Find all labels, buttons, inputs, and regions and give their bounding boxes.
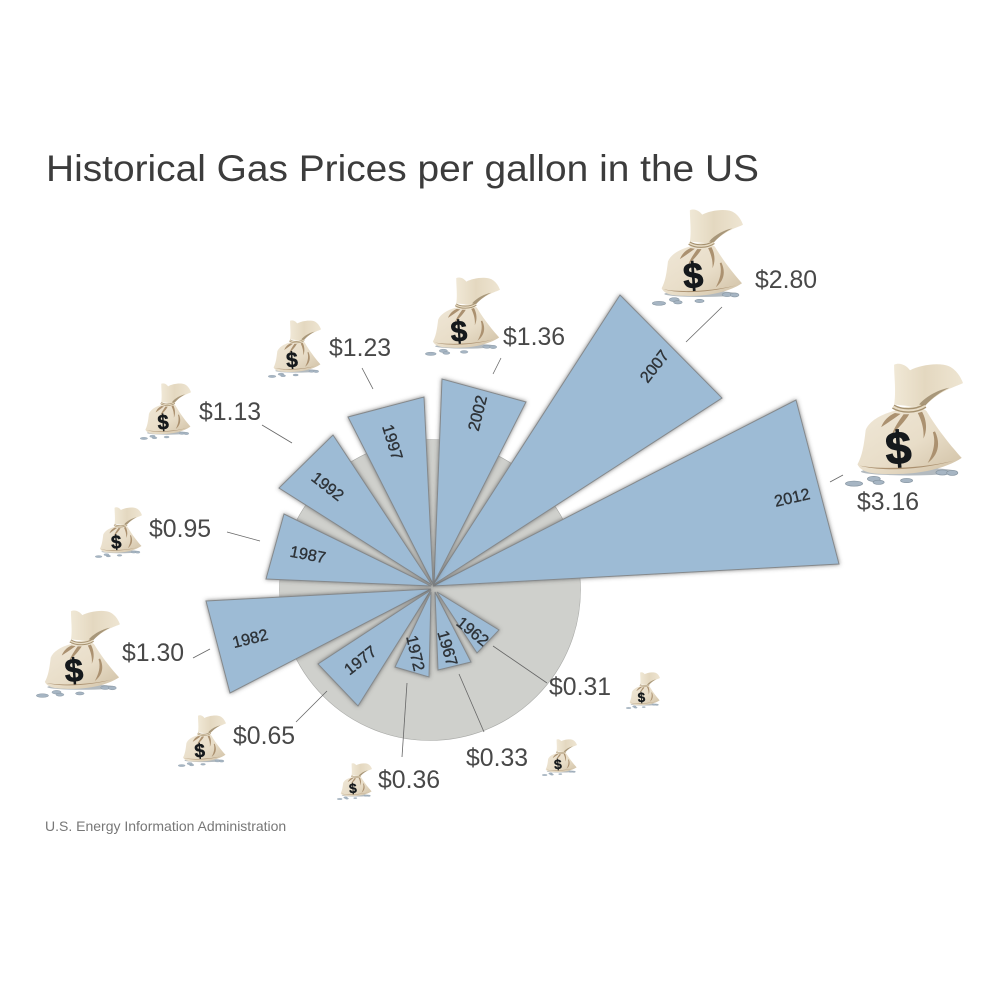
year labels: 1977 (341, 643, 380, 679)
year labels: 1997 (378, 422, 406, 462)
value labels: $3.16 (857, 489, 919, 516)
value labels: $1.23 (329, 335, 391, 362)
wedge: 1987 (266, 514, 431, 586)
value labels: $1.36 (503, 324, 565, 351)
year labels: 1982 (231, 626, 270, 652)
wedge: 1992 (279, 435, 432, 585)
wedge: 1967 (435, 592, 471, 670)
year labels (231, 347, 812, 679)
year labels: 1967 (433, 628, 461, 668)
leader lines (193, 307, 843, 757)
year labels: 2007 (637, 347, 673, 386)
wedge: 2007 (433, 295, 722, 585)
wedge: 1982 (206, 589, 431, 693)
value labels: $1.30 (122, 640, 184, 667)
year labels: 1987 (288, 543, 327, 567)
year labels: 1992 (308, 469, 347, 505)
wedge: 1997 (348, 397, 433, 584)
wedge: 2002 (434, 379, 526, 583)
wedge: 1977 (318, 590, 431, 706)
value labels: $0.31 (549, 674, 611, 701)
value labels (122, 267, 919, 794)
year labels: 2012 (773, 485, 812, 511)
value labels: $0.95 (149, 516, 211, 543)
chart: radial gas price wedges (206, 295, 839, 740)
money bag icons (36, 210, 963, 800)
reference circle (280, 440, 580, 740)
value labels: $0.33 (466, 745, 528, 772)
source note: U.S. Energy Information Administration (45, 818, 286, 834)
year labels: 1972 (402, 634, 428, 673)
value labels: $0.36 (378, 767, 440, 794)
wedge: 2012 (433, 400, 839, 586)
year labels: 2002 (465, 394, 491, 433)
value labels: $2.80 (755, 267, 817, 294)
wedge: 1962 (437, 592, 499, 653)
value labels: $1.13 (199, 399, 261, 426)
title: Historical Gas Prices per gallon in the US (46, 148, 759, 189)
value labels: $0.65 (233, 723, 295, 750)
year labels: 1962 (453, 613, 492, 650)
wedge: 1972 (395, 592, 431, 677)
